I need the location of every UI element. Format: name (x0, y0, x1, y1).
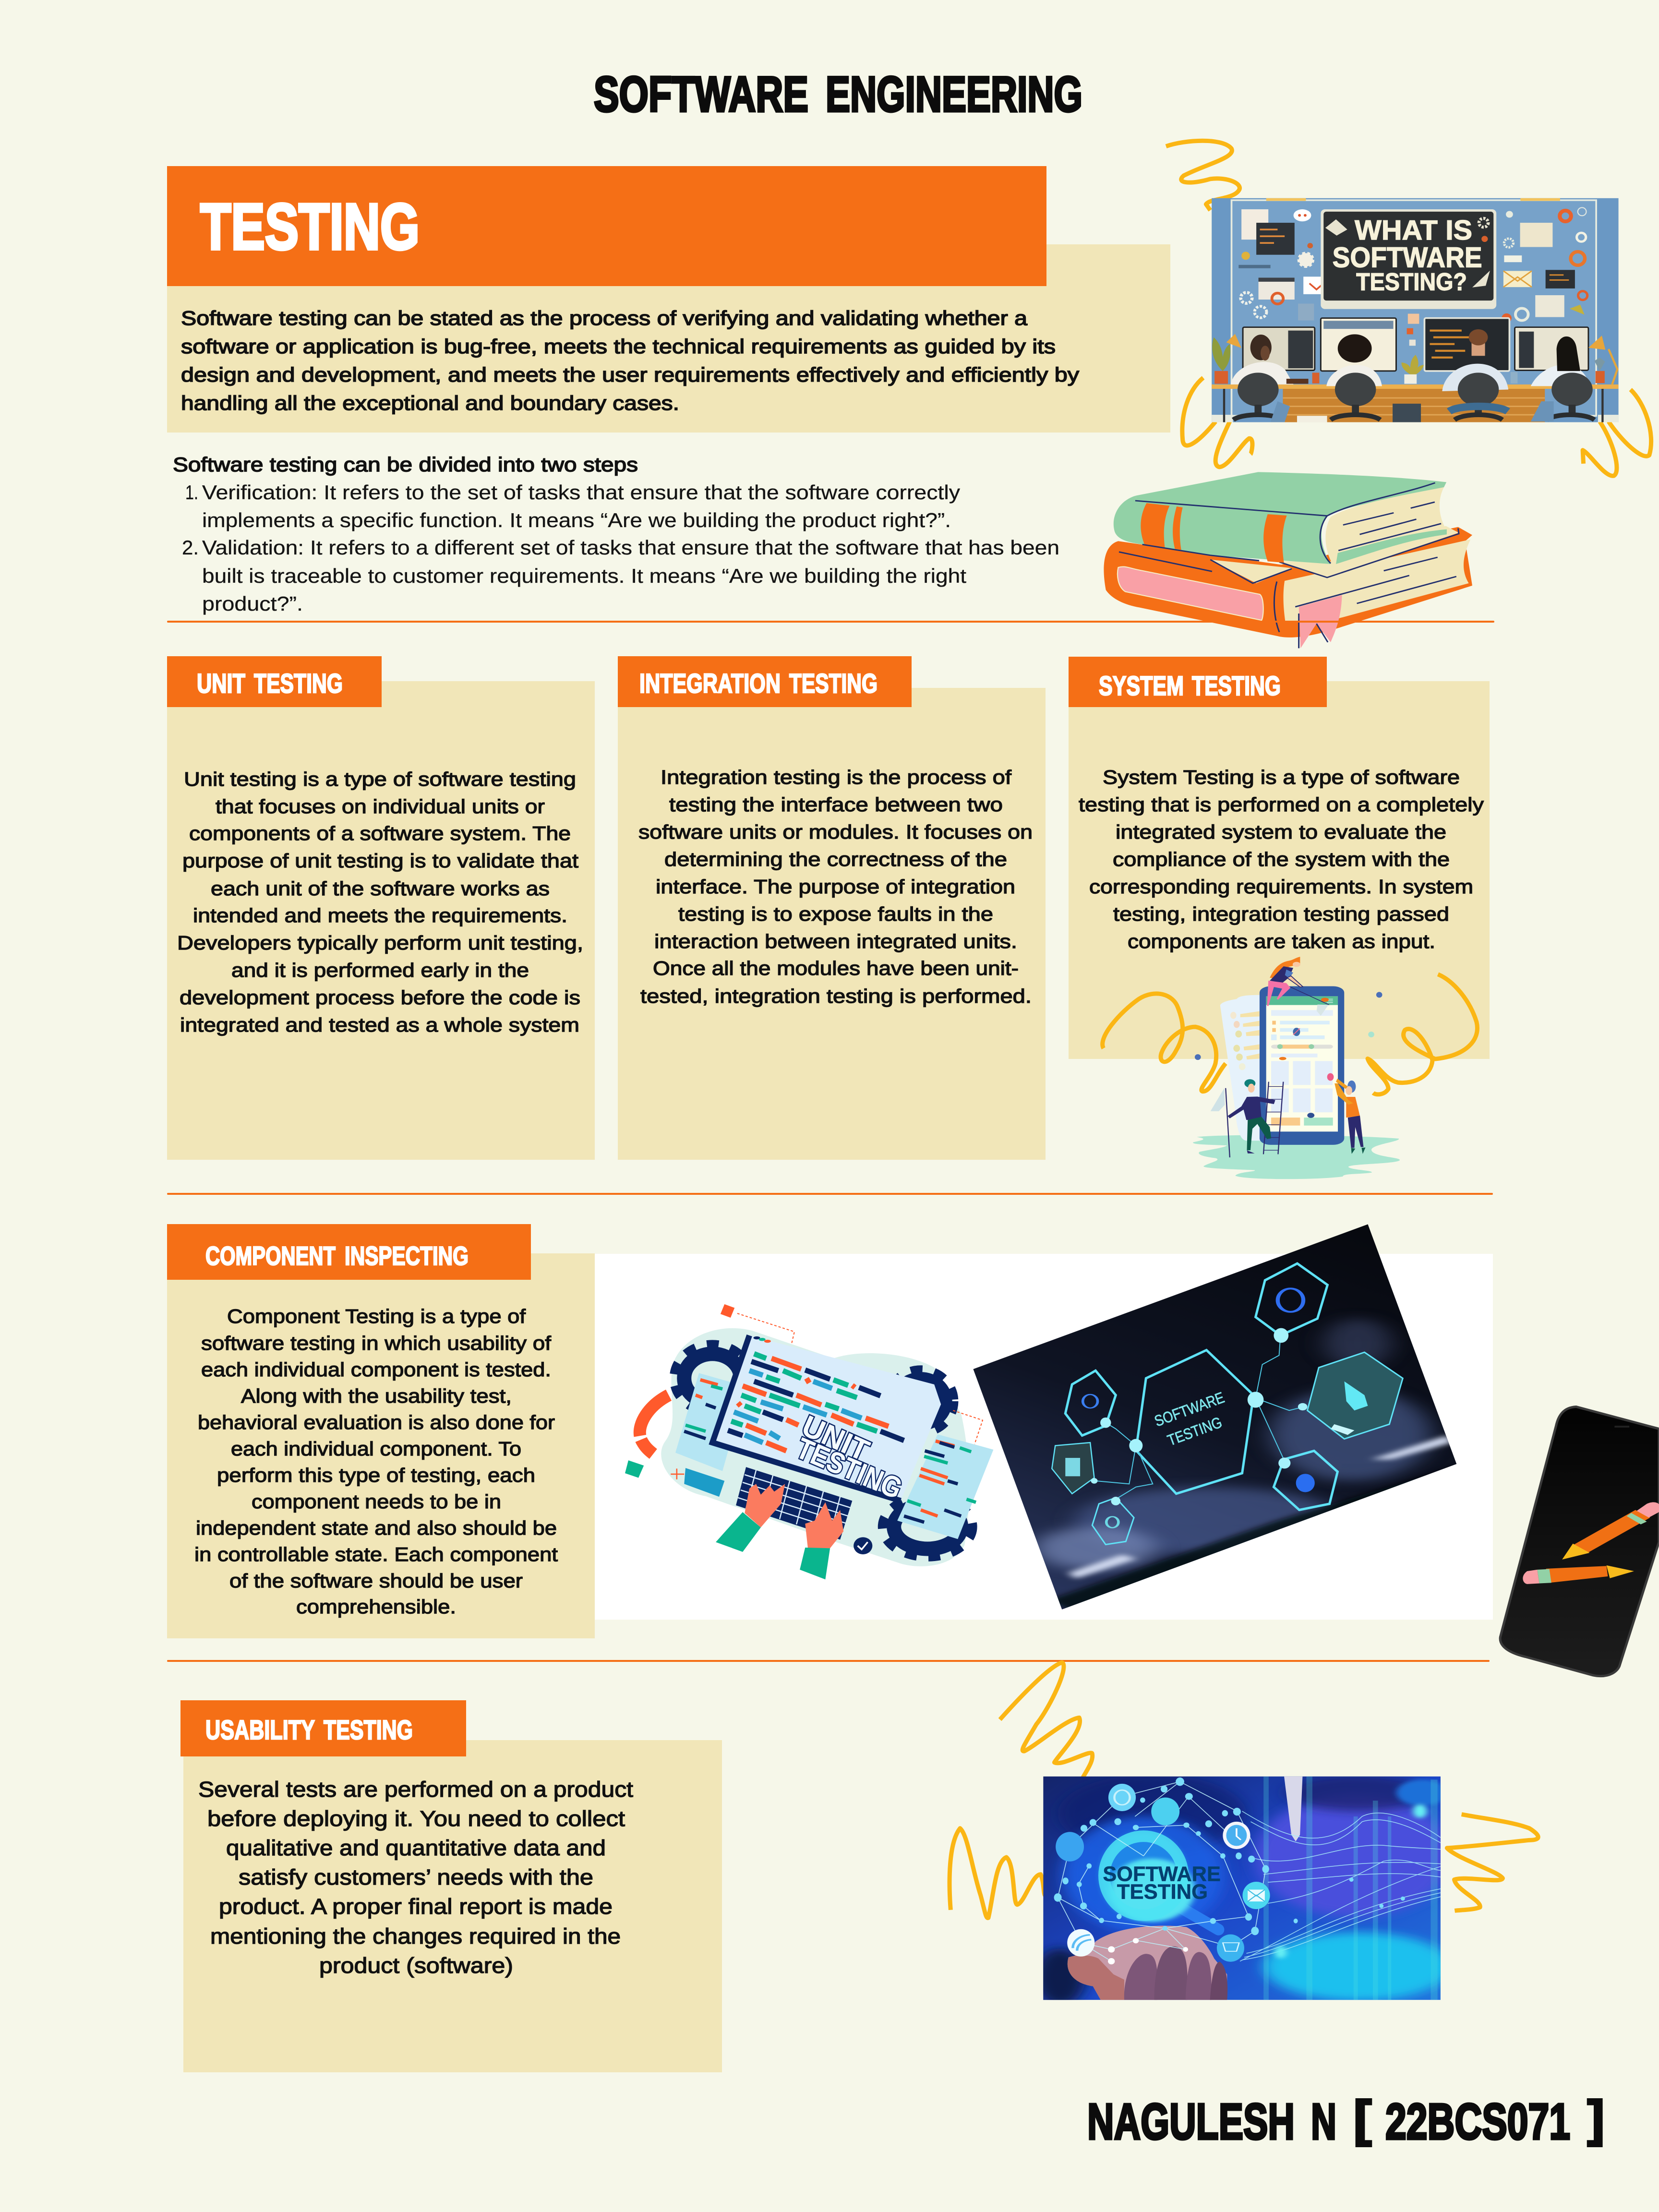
integration testing body: tested, integration testing is performed. (640, 985, 1032, 1007)
component header (167, 1224, 531, 1280)
glowing spark (1413, 1804, 1427, 1818)
unit testing body: each unit of the software works as (211, 878, 550, 900)
system testing body: compliance of the system with the (1113, 848, 1450, 870)
integration testing body: interface. The purpose of integration (656, 876, 1015, 898)
usability body: Several tests are performed on a product (198, 1777, 634, 1802)
code bars (728, 1354, 904, 1451)
author footer: 22BCS071 (1385, 2093, 1570, 2150)
wall icons right (1407, 207, 1587, 346)
component body: Along with the usability test, (241, 1385, 512, 1407)
chairs and people (1231, 329, 1594, 422)
hazy lights (1035, 1319, 1459, 1612)
unit testing body: purpose of unit testing is to validate that (182, 850, 579, 872)
intro paragraph: Software testing can be stated as the process of verifying and validating whether a (181, 307, 1028, 329)
component body: software testing in which usability of (201, 1332, 552, 1354)
bookmark (1299, 595, 1342, 648)
hexagon label: TESTING (1165, 1413, 1224, 1449)
pencil one (1562, 1502, 1659, 1560)
person 3 (1442, 364, 1508, 391)
person 4 (1531, 365, 1590, 386)
integration testing heading: TESTING (789, 668, 878, 699)
top green book (1136, 472, 1446, 516)
connectors (1095, 1335, 1304, 1499)
network nodes (1054, 1778, 1405, 1935)
network label (1103, 1862, 1221, 1903)
illustration: unit testing (625, 1304, 993, 1579)
author footer: [ (1354, 2091, 1371, 2147)
usability heading: TESTING (324, 1715, 413, 1745)
divider line two (167, 1193, 1493, 1195)
text block: two steps: Software testing can be divided into two steps (173, 453, 638, 476)
unit testing label: UNIT (797, 1409, 874, 1468)
title: ENGINEERING (826, 67, 1082, 122)
unit testing body: intended and meets the requirements. (193, 904, 567, 926)
integration testing body: testing the interface between two (669, 793, 1003, 816)
system testing body: corresponding requirements. In system (1089, 876, 1473, 898)
text block: two steps: product?”. (202, 592, 303, 615)
panel: testing introduction (167, 166, 1170, 433)
system testing body: testing, integration testing passed (1113, 903, 1449, 925)
integration testing body: testing is to expose faults in the (678, 903, 993, 925)
intro paragraph: design and development, and meets the user requirements effectively and efficiently by (181, 363, 1079, 386)
integration testing body (638, 766, 1033, 1007)
component body: in controllable state. Each component (194, 1543, 558, 1565)
flowing lines (1240, 1811, 1441, 1961)
system testing body: System Testing is a type of software (1103, 766, 1460, 788)
plants and lamps (1212, 334, 1617, 385)
integration testing body: determining the correctness of the (664, 848, 1007, 870)
component background (167, 1253, 595, 1638)
text block: two steps: 2. (182, 536, 199, 559)
network lines (1058, 1782, 1266, 1961)
hexagon label (1152, 1389, 1226, 1449)
phone body (1260, 986, 1344, 1145)
pencil two (1523, 1565, 1634, 1584)
system testing body: testing that is performed on a completely (1079, 793, 1484, 816)
board text: WHAT IS (1355, 215, 1472, 246)
network label: SOFTWARE (1103, 1862, 1221, 1886)
integration testing heading: INTEGRATION (639, 668, 781, 699)
magnifier glass (1178, 1906, 1218, 1930)
component body: comprehensible. (296, 1596, 456, 1618)
component body: independent state and also should be (196, 1517, 557, 1539)
text block: two steps: built is traceable to customer requirements. It means “Are we building the right (202, 565, 966, 587)
intro paragraph: handling all the exceptional and boundary cases. (181, 392, 679, 414)
person 2 (1326, 365, 1382, 386)
usability body: satisfy customers’ needs with the (239, 1865, 593, 1889)
screen (712, 1335, 941, 1501)
usability heading: USABILITY (205, 1715, 315, 1745)
text block: two steps (173, 453, 1059, 615)
component body: perform this type of testing, each (217, 1464, 535, 1486)
yellow scribbles (1103, 994, 1226, 1092)
intro paragraph (181, 307, 1079, 414)
phone body (1500, 1407, 1659, 1676)
component body: of the software should be user (229, 1570, 523, 1592)
image: software testing hexagon network (973, 1224, 1459, 1612)
board text (1333, 215, 1482, 295)
author footer (1087, 2091, 1604, 2150)
board text: SOFTWARE (1333, 241, 1482, 273)
keyboard (736, 1467, 852, 1539)
component body: each individual component is tested. (201, 1358, 551, 1381)
usability body: qualitative and quantitative data and (226, 1836, 606, 1860)
system testing body (1079, 766, 1484, 952)
system testing heading: SYSTEM (1099, 671, 1184, 701)
wall icons left (1238, 209, 1332, 321)
usability body: product. A proper final report is made (219, 1894, 613, 1919)
hand (1068, 1926, 1227, 2000)
unit testing heading (197, 668, 343, 699)
text block: two steps: Verification: It refers to the set of tasks that ensure that the software correctly (202, 481, 960, 504)
system testing heading: TESTING (1192, 671, 1281, 701)
author footer: NAGULESH (1087, 2093, 1295, 2150)
panel: integration testing (618, 656, 1046, 1160)
intro paragraph: software or application is bug-free, meets the technical requirements as guided by its (181, 335, 1056, 358)
divider line one (167, 621, 1494, 623)
monitors (1243, 318, 1588, 371)
title: SOFTWARE (594, 67, 808, 122)
phone screen (1266, 996, 1338, 1131)
node icons (1065, 1288, 1368, 1527)
component body: Component Testing is a type of (227, 1305, 526, 1327)
illustration: bug hunting on a phone (1103, 957, 1477, 1179)
component heading: INSPECTING (345, 1241, 469, 1271)
unit testing body: components of a software system. The (189, 822, 571, 844)
author footer: ] (1587, 2091, 1604, 2147)
integration testing header (618, 656, 912, 707)
unit testing body: integrated and tested as a whole system (180, 1014, 579, 1036)
panel: system testing (1069, 657, 1490, 1059)
component heading (205, 1241, 469, 1271)
hexagon nodes (1052, 1263, 1403, 1545)
board text: TESTING? (1356, 268, 1467, 295)
usability background (183, 1740, 722, 2072)
board (1321, 209, 1496, 309)
usability header (180, 1700, 466, 1756)
system testing header (1069, 657, 1327, 707)
unit testing body: Unit testing is a type of software testing (184, 768, 576, 790)
unit testing background (167, 681, 595, 1160)
title (594, 67, 1082, 122)
unit testing body (177, 768, 583, 1036)
author footer: N (1311, 2093, 1336, 2150)
man on ladder (1211, 1079, 1283, 1157)
unit testing label: TESTING (792, 1431, 907, 1506)
unit testing heading: UNIT (197, 668, 245, 699)
usability heading (205, 1715, 413, 1745)
integration testing body: Integration testing is the process of (661, 766, 1012, 788)
text block: two steps: Validation: It refers to a different set of tasks that ensure that the software that has been (202, 536, 1059, 559)
hands (745, 1484, 785, 1527)
unit testing heading: TESTING (254, 668, 343, 699)
side panel code (684, 1380, 976, 1522)
man in orange (1334, 1079, 1365, 1154)
unit testing header (167, 656, 382, 707)
component body (194, 1305, 558, 1618)
unit testing body: and it is performed early in the (231, 959, 529, 981)
mint puddle (1193, 1135, 1400, 1179)
text block: two steps: implements a specific function. It means “Are we building the product right?”. (202, 509, 951, 531)
mint blobs (661, 1328, 969, 1566)
usability body: product (software) (319, 1953, 513, 1978)
usability body: before deploying it. You need to collect (207, 1806, 625, 1831)
testing heading: TESTING (200, 190, 420, 263)
component body: behavioral evaluation is also done for (198, 1411, 555, 1433)
scribbles around software testing image (950, 1662, 1538, 1918)
system testing body: components are taken as input. (1128, 930, 1435, 952)
unit testing body: Developers typically perform unit testing, (177, 932, 583, 954)
integration testing background (618, 688, 1046, 1160)
unit testing body: that focuses on individual units or (216, 795, 545, 817)
image: what is software testing (1212, 198, 1619, 422)
testing banner (167, 166, 1046, 286)
panel: component inspecting (167, 1224, 595, 1638)
side panels (675, 1373, 731, 1471)
panel: unit testing (167, 656, 595, 1160)
usability body (198, 1777, 634, 1978)
person 1 (1231, 362, 1294, 385)
usability body: mentioning the changes required in the (210, 1924, 621, 1948)
divider line three (167, 1660, 1490, 1662)
text block: two steps: 1. (185, 481, 198, 504)
girl sitting on phone (1267, 957, 1329, 1016)
vertical light streaks (1263, 1777, 1438, 2000)
white image panel (595, 1254, 1493, 1620)
illustration: phone with pencils (1500, 1407, 1659, 1676)
system testing heading (1099, 671, 1281, 701)
intro background (167, 244, 1170, 433)
panel: usability testing (180, 1700, 722, 2072)
chair backs (1238, 373, 1279, 407)
component heading: COMPONENT (205, 1241, 336, 1271)
image: software testing hand network (1034, 1774, 1452, 2006)
desk and brick (1283, 388, 1545, 422)
integration testing body: Once all the modules have been unit- (653, 957, 1019, 979)
unit testing body: development process before the code is (180, 986, 580, 1009)
gears (675, 1345, 972, 1556)
hexagon label: SOFTWARE (1152, 1389, 1226, 1430)
network label: TESTING (1117, 1880, 1208, 1903)
check badge (854, 1537, 872, 1554)
big round icons (1056, 1784, 1270, 1962)
scribbles around testing image (1166, 141, 1651, 476)
image backdrop (1212, 198, 1619, 422)
system testing body: integrated system to evaluate the (1116, 821, 1446, 843)
icon: stack of books (1104, 472, 1472, 648)
blue dots (1195, 992, 1382, 1060)
dark backdrop (973, 1224, 1456, 1610)
integration testing body: interaction between integrated units. (654, 930, 1017, 952)
component body: each individual component. To (231, 1438, 521, 1460)
unit testing label (792, 1409, 907, 1506)
tie (1284, 1777, 1302, 1841)
integration testing body: software units or modules. It focuses on (638, 821, 1033, 843)
system testing background (1069, 681, 1490, 1059)
orange gauge arc (640, 1395, 669, 1454)
checklist paper (1220, 995, 1262, 1141)
blue backdrop (1043, 1777, 1441, 2000)
component body: component needs to be in (252, 1491, 501, 1513)
bugs (1279, 998, 1334, 1118)
bottom orange book (1104, 527, 1472, 637)
